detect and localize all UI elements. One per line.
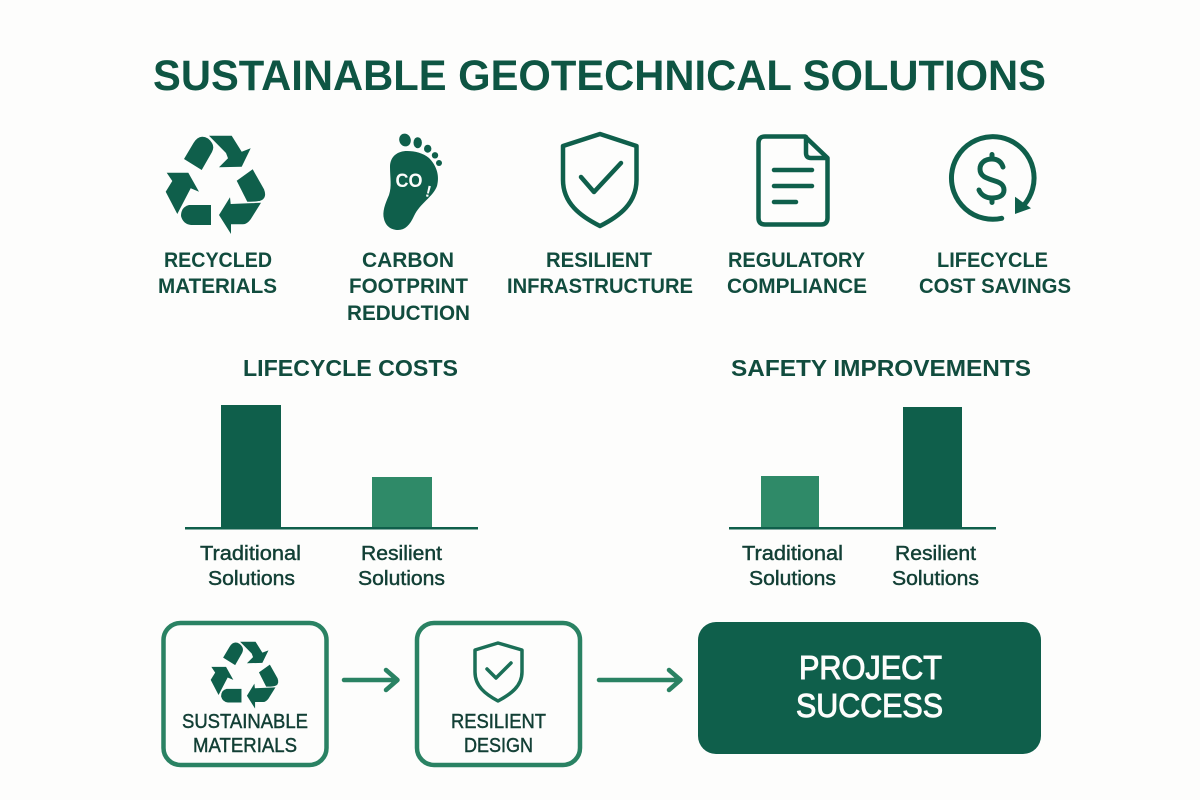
bar labels: lifecycle costs: Solutions — [208, 568, 295, 590]
icon: dollar in circular arrow — [951, 137, 1034, 219]
arrow: design to success — [599, 670, 680, 690]
flow: resilient design step — [417, 623, 580, 765]
label: resilient design: DESIGN — [464, 735, 533, 757]
chart heading: safety improvements: SAFETY IMPROVEMENTS — [731, 355, 1031, 381]
benefit: resilient infrastructure — [507, 134, 693, 298]
bar labels: safety improvements: Resilient — [895, 543, 976, 565]
label: project success: SUCCESS — [796, 687, 943, 724]
label: recycled materials: RECYCLED — [164, 249, 272, 272]
bar labels: safety improvements — [742, 543, 979, 590]
bar: resilient solutions safety — [903, 407, 962, 528]
benefit: regulatory compliance — [727, 136, 867, 298]
label: resilient design: RESILIENT — [451, 711, 546, 733]
bar: resilient solutions cost — [372, 477, 432, 528]
bar labels: safety improvements: Traditional — [742, 543, 843, 565]
label: regulatory compliance: REGULATORY — [728, 249, 865, 272]
bar labels: safety improvements: Solutions — [892, 568, 979, 590]
icon: shield with check — [563, 134, 636, 226]
panel: safety improvements chart — [729, 355, 1031, 590]
label: carbon footprint reduction: FOOTPRINT — [349, 275, 468, 298]
chart heading: lifecycle costs: LIFECYCLE COSTS — [243, 355, 458, 381]
label: lifecycle cost savings — [919, 249, 1071, 298]
label: recycled materials: MATERIALS — [158, 275, 277, 298]
benefit: lifecycle cost savings — [919, 137, 1071, 298]
bar labels: lifecycle costs: Solutions — [358, 568, 445, 590]
label: sustainable materials: SUSTAINABLE — [182, 711, 308, 733]
title: SUSTAINABLE GEOTECHNICAL SOLUTIONS — [153, 52, 1046, 100]
label: recycled materials — [158, 249, 277, 298]
label: carbon footprint reduction: REDUCTION — [347, 302, 470, 325]
label: project success: PROJECT — [799, 649, 942, 686]
label: sustainable materials: MATERIALS — [193, 735, 297, 757]
benefit: recycled materials — [158, 136, 277, 298]
bar labels: lifecycle costs: Traditional — [200, 543, 301, 565]
panel: lifecycle costs chart — [185, 355, 478, 590]
bar labels: lifecycle costs — [200, 543, 445, 590]
label: sustainable materials — [182, 711, 308, 757]
arrow: materials to design — [344, 670, 398, 690]
icon: recycling arrows — [166, 136, 265, 234]
icon: small shield with check — [475, 643, 522, 701]
icon: footprint with CO2: ! — [424, 183, 433, 201]
benefit: carbon footprint reduction — [347, 132, 470, 325]
label: regulatory compliance: COMPLIANCE — [727, 275, 867, 298]
flow: sustainable materials step — [164, 623, 326, 765]
panel: benefit icons row — [158, 132, 1071, 325]
label: regulatory compliance — [727, 249, 867, 298]
bar labels: lifecycle costs: Resilient — [361, 543, 442, 565]
label: resilient design — [451, 711, 546, 757]
label: carbon footprint reduction: CARBON — [362, 249, 454, 272]
bar: traditional solutions safety — [761, 476, 819, 528]
bar labels: safety improvements: Solutions — [749, 568, 836, 590]
flow: project success box — [698, 622, 1041, 754]
icon: footprint with CO2 — [383, 132, 442, 230]
label: lifecycle cost savings: LIFECYCLE — [937, 249, 1048, 272]
label: project success — [796, 649, 943, 724]
label: resilient infrastructure: INFRASTRUCTURE — [507, 275, 693, 298]
label: lifecycle cost savings: COST SAVINGS — [919, 275, 1071, 298]
label: resilient infrastructure — [507, 249, 693, 298]
icon: document — [758, 136, 828, 224]
label: carbon footprint reduction — [347, 249, 470, 325]
bar: traditional solutions cost — [221, 405, 281, 528]
icon: small recycling arrows — [211, 642, 278, 709]
icon: footprint with CO2: CO — [396, 171, 422, 192]
label: resilient infrastructure: RESILIENT — [546, 249, 652, 272]
